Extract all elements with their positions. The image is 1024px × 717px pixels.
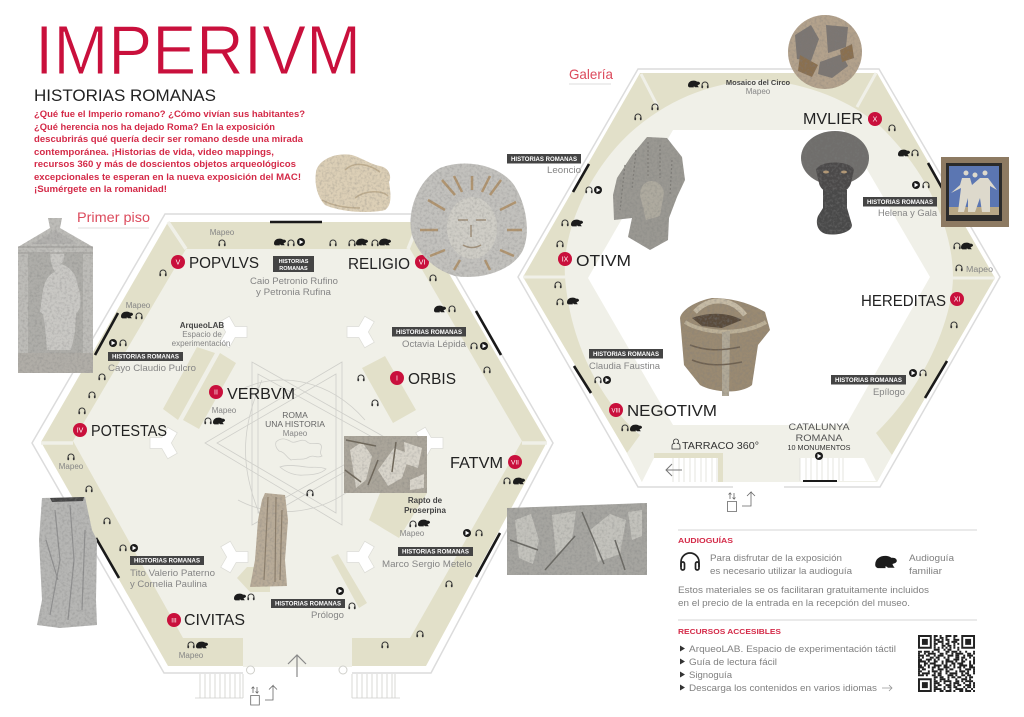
room: VERBVM: II [214,390,218,396]
QR code [918,636,975,691]
photo: funerary stele [18,218,93,373]
entrance circles [246,666,347,674]
room: CIVITAS: III [171,618,177,624]
mapping labels: Mapeo [210,228,235,237]
text: family audio guide [909,553,955,576]
tag: Caio Petronio Rufino: HISTORIAS [279,259,309,265]
photo: Mvlier head [801,131,869,235]
room: ORBIS: ORBIS [408,371,456,388]
tag: Epílogo: HISTORIAS ROMANAS [835,378,902,384]
tag: Octavia Lépida: HISTORIAS ROMANAS [396,330,462,336]
title: IMPERIVM [35,11,361,89]
mapping labels: Mapeo [179,651,204,660]
photo: Otivm head [613,137,685,250]
tag: Prólogo: Prólogo [311,610,344,621]
courtyard [588,130,930,425]
photo: draped statue [37,497,97,628]
audio guide icons, first floor [67,238,525,648]
photo: central statue [250,493,288,587]
central title [265,410,325,438]
intro text: excepcionales te esperan en la nueva exposición del MAC! [34,171,301,182]
room: HEREDITAS: XI [954,296,960,304]
text: free materials: en el precio de la entrada en la recepción del museo. [678,598,910,608]
tag: Tito Valerio Paterno: y Cornelia Paulina [130,579,208,590]
tag: Tito Valerio Paterno: Tito Valerio Paterno [130,568,215,579]
panel: gallery plan [507,69,1000,512]
mapping labels: Mapeo [59,462,84,471]
gallery outline [518,69,1000,487]
text: audio guide needed: es necesario utilizar la audioguía [710,566,853,576]
heading: audio guides: AUDIOGUÍAS [678,536,733,545]
text: free materials [678,585,929,608]
room: FATVM: VII [511,460,519,466]
Tarraco 360: TARRACO 360° [682,440,759,452]
room: CIVITAS: CIVITAS [184,612,245,629]
tag: Cayo Claudio Pulcro: Cayo Claudio Pulcro [108,363,196,374]
room: OTIVM [558,252,631,270]
white orientation marks [150,316,443,573]
tag: Cayo Claudio Pulcro: HISTORIAS ROMANAS [112,355,179,361]
central floor [73,249,522,667]
tag: Claudia Faustina: HISTORIAS ROMANAS [593,352,659,358]
panel: first floor plan [32,214,553,705]
room: OTIVM: OTIVM [576,253,631,270]
room: RELIGIO: RELIGIO [348,256,410,273]
tag: Octavia Lépida [392,327,467,350]
icon: family audio guide [875,556,897,568]
Catalunya Romana: CATALUNYA [788,422,850,433]
central title: ROMA [282,410,308,420]
inner display blocks [163,347,427,608]
photo: stone rabbit [315,154,390,212]
tag: Tito Valerio Paterno [130,556,215,590]
tag: Caio Petronio Rufino: ROMANAS [279,266,308,272]
Catalunya Romana [788,422,851,452]
exhibition wall band [41,222,547,666]
black display walls [573,163,947,398]
intro text: ¡Sumérgete en la romanidad! [34,183,167,194]
intro text [34,108,305,194]
Rapto de Proserpina text [400,496,446,538]
photo: Medusa relief [410,163,527,277]
tag: Epílogo [831,375,906,398]
room: OTIVM: IX [562,256,569,264]
arrow: downloads [882,685,892,691]
room: MVLIER: MVLIER [803,111,863,128]
subtitle: HISTORIAS ROMANAS [34,87,216,105]
room: POTESTAS: POTESTAS [91,423,167,440]
hexagram and map [205,362,395,525]
floor outline [32,214,553,673]
tag: Octavia Lépida: Octavia Lépida [402,339,467,350]
list of resources: ArqueoLAB. Espacio de experimentación táctil [689,644,896,654]
entrance arrow [288,655,306,677]
list of resources: Guía de lectura fácil [689,657,777,667]
tag: Marco Sergio Metelo: Marco Sergio Metelo [382,559,472,570]
central title: UNA HISTORIA [265,419,325,429]
panel: accessible resources [678,620,977,693]
tag: Helena y Gala: HISTORIAS ROMANAS [867,200,933,206]
Rapto de Proserpina text: Mapeo [400,529,425,538]
icon: headphones [681,553,699,570]
tag: Claudia Faustina: Claudia Faustina [589,361,661,372]
Mosaico del Circo text: Mapeo [746,87,771,96]
ArqueoLAB text: ArqueoLAB [180,321,224,330]
mapping labels: Mapeo [126,301,151,310]
tag: Cayo Claudio Pulcro [108,352,196,374]
gallery stairs right [800,458,876,481]
intro text: recursos 360 y más de doscientos objetos arqueológicos [34,158,296,169]
Catalunya Romana: 10 MONUMENTOS [788,445,851,452]
photo: circular mosaic [788,15,862,89]
Mosaico del Circo text [726,78,791,96]
intro text: descubrirás qué quería decir ser romano desde una mirada [34,133,304,144]
tag: Leoncio [507,154,581,176]
ArqueoLAB text [172,321,230,348]
gallery stairs left [642,453,723,482]
photo: sarcophagus relief [507,503,647,575]
photo: Proserpina relief [344,436,427,493]
room: NEGOTIVM: NEGOTIVM [627,403,717,420]
Rapto de Proserpina text: Rapto de [408,496,443,505]
tag: Tito Valerio Paterno: HISTORIAS ROMANAS [134,559,200,565]
intro text: contemporánea. ¡Historias de vida, video mappings, [34,146,274,157]
ArqueoLAB text: experimentación [172,339,230,348]
tag: Marco Sergio Metelo [382,547,473,570]
room: RELIGIO: VI [419,260,425,266]
ArqueoLAB text: Espacio de [182,330,222,339]
mapping label, gallery: Mapeo [966,265,994,274]
tag: Leoncio: Leoncio [547,165,581,176]
tag: Helena y Gala [863,197,938,219]
room: HEREDITAS: HEREDITAS [861,293,946,310]
audio guide icons, gallery [554,81,973,460]
tag: Caio Petronio Rufino: Caio Petronio Rufino [250,276,338,287]
tag: Epílogo: Epílogo [873,387,905,398]
exit arrow [666,464,682,476]
photo: Three Graces mosaic [941,157,1009,227]
text: family audio guide: Audioguía [909,553,955,563]
heading: accessible resources: RECURSOS ACCESIBLES [678,627,781,636]
tag: Caio Petronio Rufino: y Petronia Rufina [256,287,332,298]
room: POTESTAS: IV [77,428,84,434]
lift and stairs icon [728,492,755,512]
tag: Prólogo [271,599,345,621]
text: audio guide needed [710,553,853,576]
list of resources [680,644,896,693]
photo: woven basket [680,298,770,396]
gallery separators [523,73,995,278]
room: NEGOTIVM: VIII [611,408,621,414]
lift and stairs icon [251,686,277,705]
tag: Marco Sergio Metelo: HISTORIAS ROMANAS [402,550,469,556]
text: audio guide needed: Para disfrutar de la exposición [710,553,842,563]
Catalunya Romana: ROMANA [796,433,843,444]
intro text: ¿Qué fue el Imperio romano? ¿Cómo vivían sus habitantes? [34,108,305,119]
room separators [41,222,547,443]
list of resources: Descarga los contenidos en varios idiomas [689,683,877,693]
text: free materials: Estos materiales se os facilitaran gratuitamente incluidos [678,585,929,595]
room: ORBIS: I [396,376,398,382]
room: MVLIER: X [873,116,878,124]
tag: Helena y Gala: Helena y Gala [878,208,938,219]
section label: gallery: Galería [569,66,613,82]
black display walls [95,222,501,578]
gallery wall band [523,73,995,482]
Mosaico del Circo text: Mosaico del Circo [726,78,791,87]
list of resources: Signoguía [689,670,733,680]
gallery corridor [565,80,953,482]
central title: Mapeo [283,429,308,438]
panel: audio guides [678,530,977,608]
stairs [195,674,400,698]
tag: Prólogo: HISTORIAS ROMANAS [275,602,341,608]
intro text: ¿Qué herencia nos ha dejado Roma? En la exposición [34,121,275,132]
text: family audio guide: familiar [909,566,942,576]
room: VERBVM: VERBVM [227,386,295,403]
room: FATVM: FATVM [450,455,503,472]
tag: Caio Petronio Rufino [250,256,338,298]
tag: Leoncio: HISTORIAS ROMANAS [511,157,577,163]
tag: Claudia Faustina [589,349,663,372]
mapping labels [59,228,237,660]
mapping labels: Mapeo [212,406,237,415]
room: POPVLVS: V [176,260,181,266]
section label: first floor: Primer piso [77,209,150,225]
Rapto de Proserpina text: Proserpina [404,506,446,515]
room: POPVLVS: POPVLVS [189,255,259,272]
